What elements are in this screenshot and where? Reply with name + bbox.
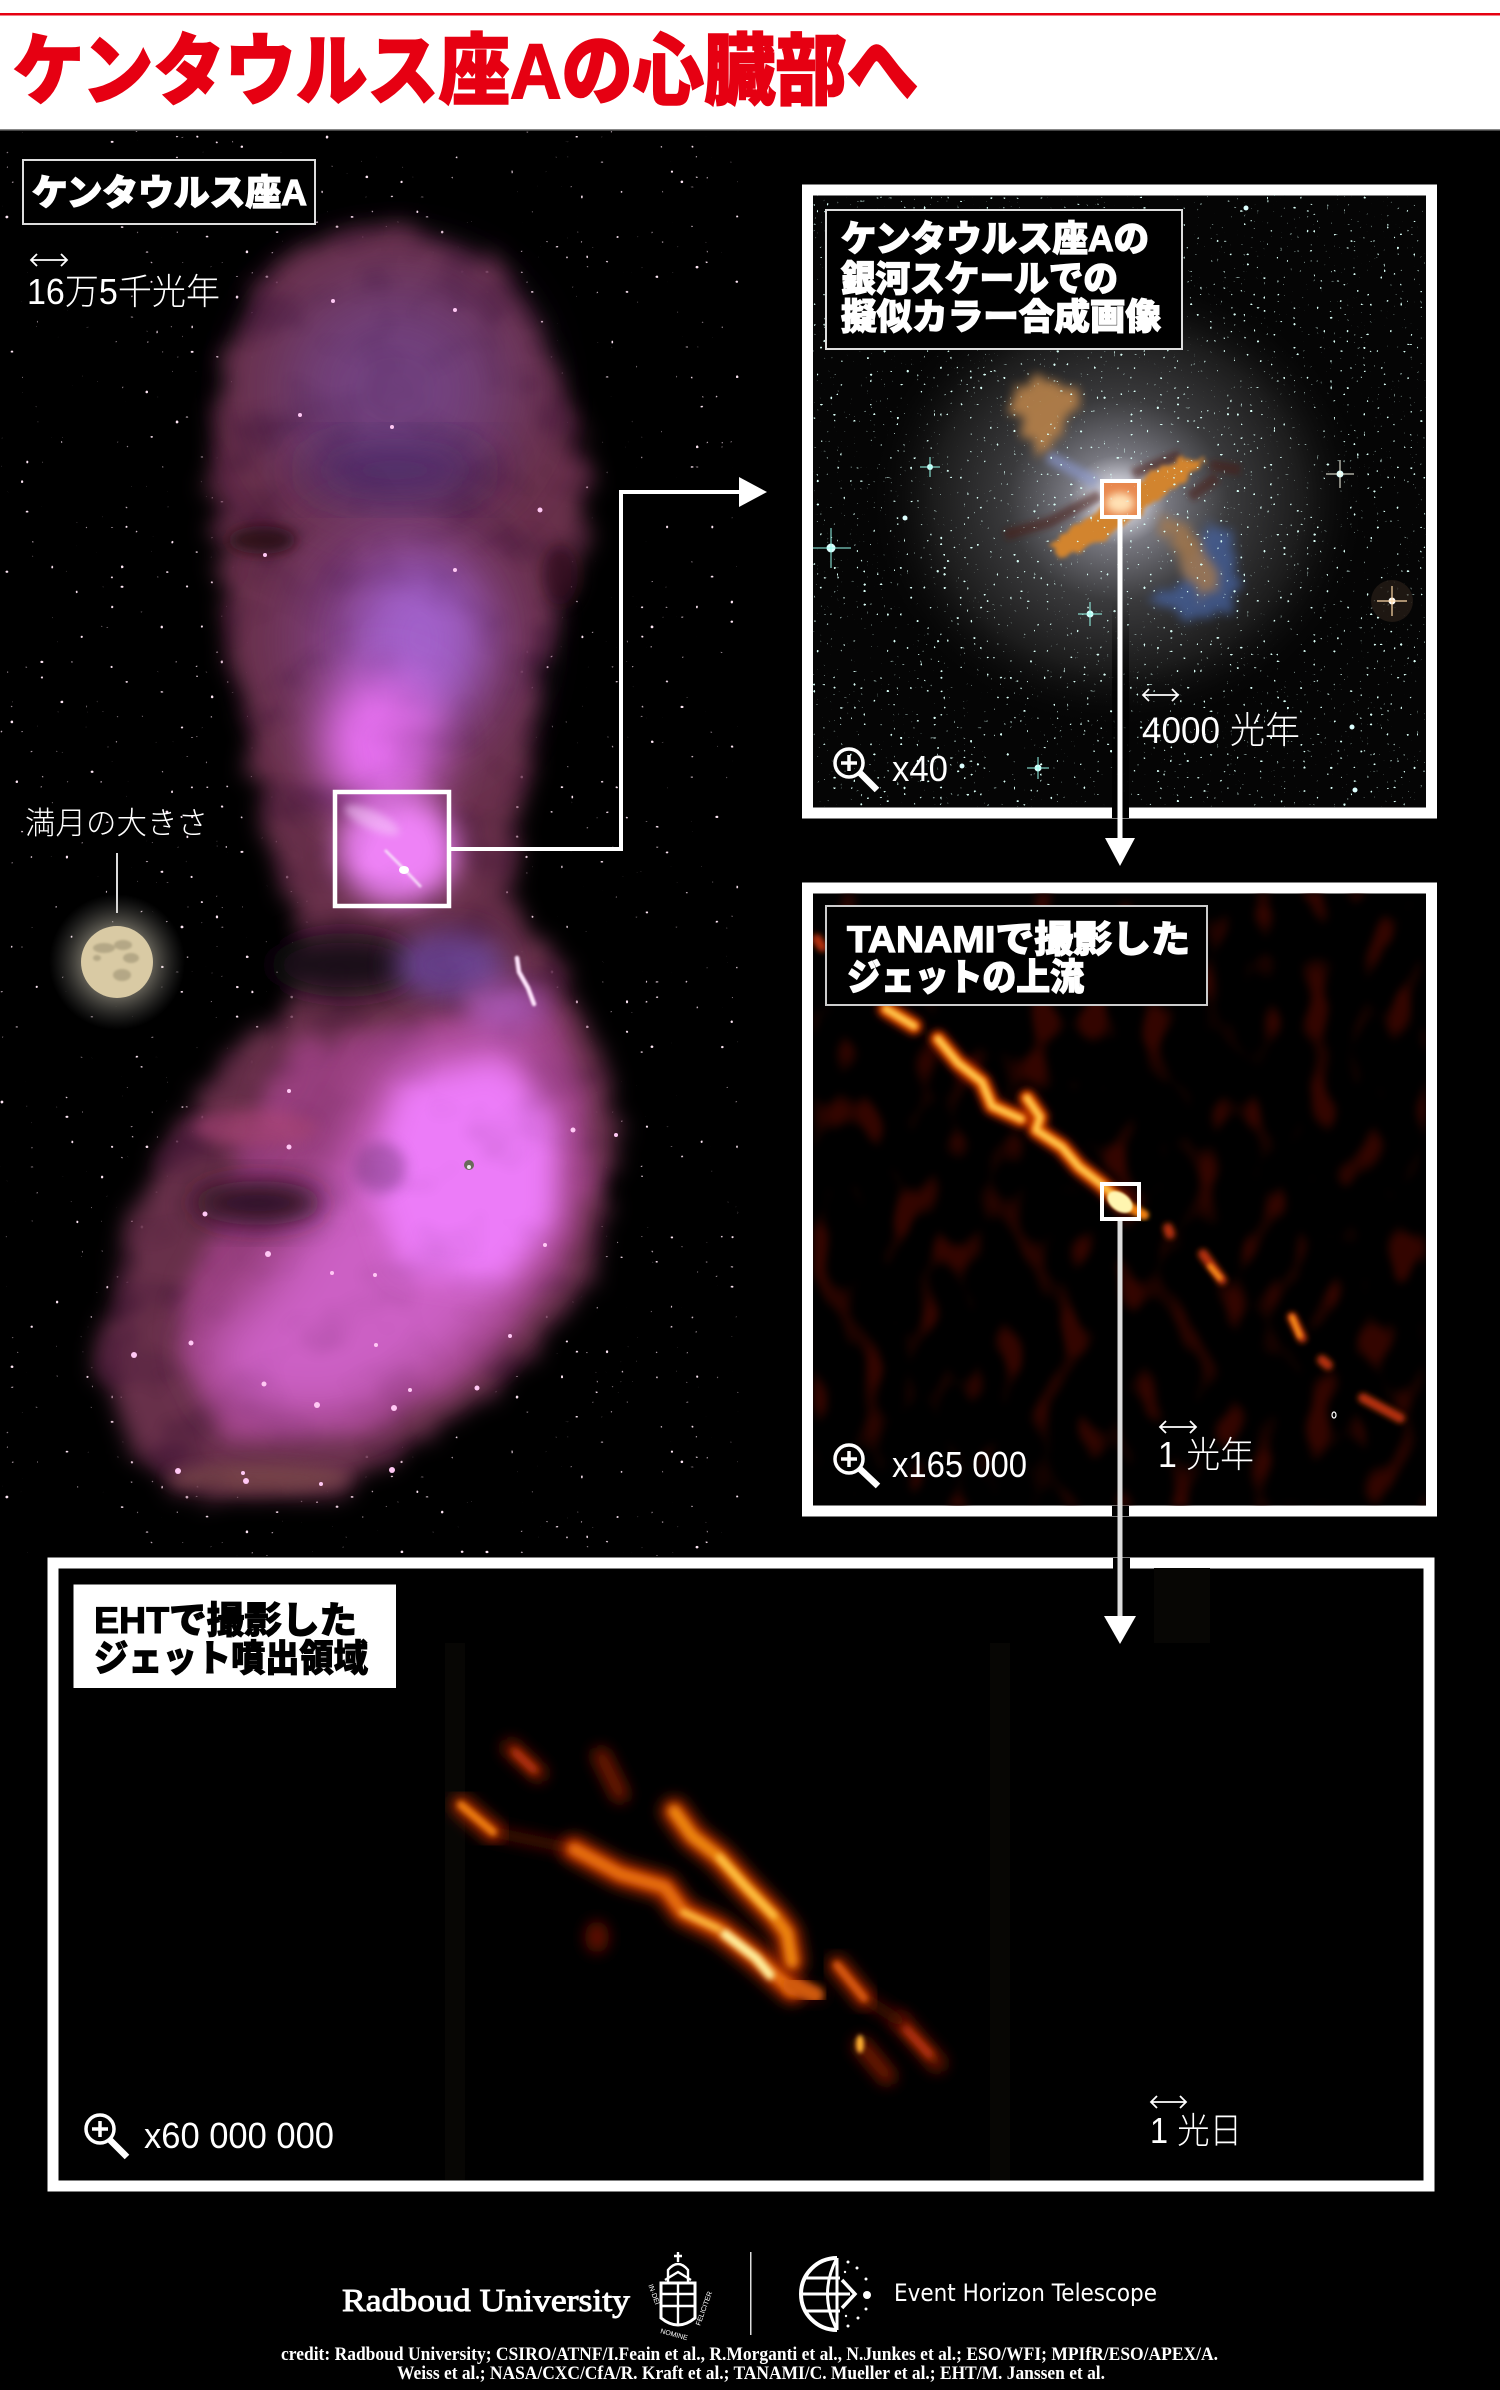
jet xyxy=(817,939,1400,1418)
label: TANAMI: TANAMIで撮影した xyxy=(847,919,1190,960)
moon with label xyxy=(25,806,208,1030)
icon: university crest: FELICITER xyxy=(695,2291,714,2327)
noise background xyxy=(813,893,1426,1506)
galaxy xyxy=(906,316,1330,694)
credit text xyxy=(281,2344,1218,2384)
icon: magnifier x165 000 xyxy=(835,1444,1027,1486)
hot spot xyxy=(517,958,534,1004)
scale: 1 light year: 1 光年 xyxy=(1158,1434,1254,1475)
stars over lobes xyxy=(131,299,618,1486)
moon with label: 満月の大きさ xyxy=(25,806,208,841)
header band xyxy=(0,0,1500,130)
label: EHT: ジェット噴出領域 xyxy=(94,1638,368,1679)
label: TANAMI xyxy=(826,906,1207,1005)
icon: magnifier x40: x40 xyxy=(892,748,948,789)
bright stars xyxy=(811,206,1358,792)
scale: 165 thousand light years xyxy=(27,254,220,312)
panel: EHT jet launching region xyxy=(53,1563,1429,2186)
jet image xyxy=(461,1748,937,2076)
credit text: credit: Radboud University; CSIRO/ATNF/I.Feain et al., R.Morganti et al., N.Junkes et al.; ESO/WFI; MPIfR/ESO/APEX/A. xyxy=(281,2344,1218,2365)
icon: magnifier x40 xyxy=(835,748,948,790)
logo: Radboud University xyxy=(342,2252,714,2342)
icon: university crest: IN·DEI xyxy=(646,2284,660,2306)
label: EHT: EHTで撮影した xyxy=(94,1600,357,1641)
icon: university crest: NOMINE xyxy=(659,2328,689,2342)
panel: galaxy false-colour composite xyxy=(808,190,1432,813)
starfield xyxy=(0,131,740,1556)
icon: magnifier x165 000: x165 000 xyxy=(892,1444,1027,1485)
arrow: TANAMI to EHT xyxy=(1102,1184,1139,1644)
panel: TANAMI jet xyxy=(808,888,1432,1511)
credit text: Weiss et al.; NASA/CXC/CfA/R. Kraft et al.; TANAMI/C. Mueller et al.; EHT/M. Janssen et al. xyxy=(397,2363,1105,2384)
inner jet inside box xyxy=(341,799,421,887)
scale: 1 light day: 1 光日 xyxy=(1150,2110,1242,2151)
label: TANAMI: ジェットの上流 xyxy=(847,957,1084,998)
arrow: to galaxy panel xyxy=(450,477,767,849)
radio lobes xyxy=(94,225,619,1496)
label: galaxy scale image xyxy=(826,210,1182,349)
logo: Event Horizon Telescope xyxy=(801,2258,1157,2330)
logo: Event Horizon Telescope: Event Horizon Telescope xyxy=(894,2279,1157,2307)
label: galaxy scale image: 擬似カラー合成画像 xyxy=(841,296,1161,337)
scale: 165 thousand light years: 16万5千光年 xyxy=(27,271,220,312)
icon: globe and arrow xyxy=(801,2258,871,2330)
label: galaxy scale image: ケンタウルス座Aの xyxy=(841,218,1149,259)
orange star xyxy=(1371,580,1413,622)
label: Centaurus A xyxy=(23,160,315,224)
label: galaxy scale image: 銀河スケールでの xyxy=(841,258,1118,299)
zoom box xyxy=(335,792,449,906)
label: EHT xyxy=(74,1584,396,1688)
label: Centaurus A: ケンタウルス座A xyxy=(32,172,307,213)
title: ケンタウルス座Aの心臓部へ xyxy=(13,27,918,115)
arrow: galaxy to TANAMI xyxy=(1102,481,1139,866)
divider xyxy=(750,2252,752,2335)
scale: 4000 light years: 4000 光年 xyxy=(1142,710,1300,751)
scale: 1 light day xyxy=(1150,2096,1242,2151)
logo: Radboud University: Radboud University xyxy=(342,2282,630,2318)
icon: university crest xyxy=(646,2252,714,2342)
panel: Centaurus A radio lobes xyxy=(0,131,740,1556)
scale: 4000 light years xyxy=(1142,689,1300,751)
icon: magnifier x60 000 000: x60 000 000 xyxy=(144,2115,334,2156)
